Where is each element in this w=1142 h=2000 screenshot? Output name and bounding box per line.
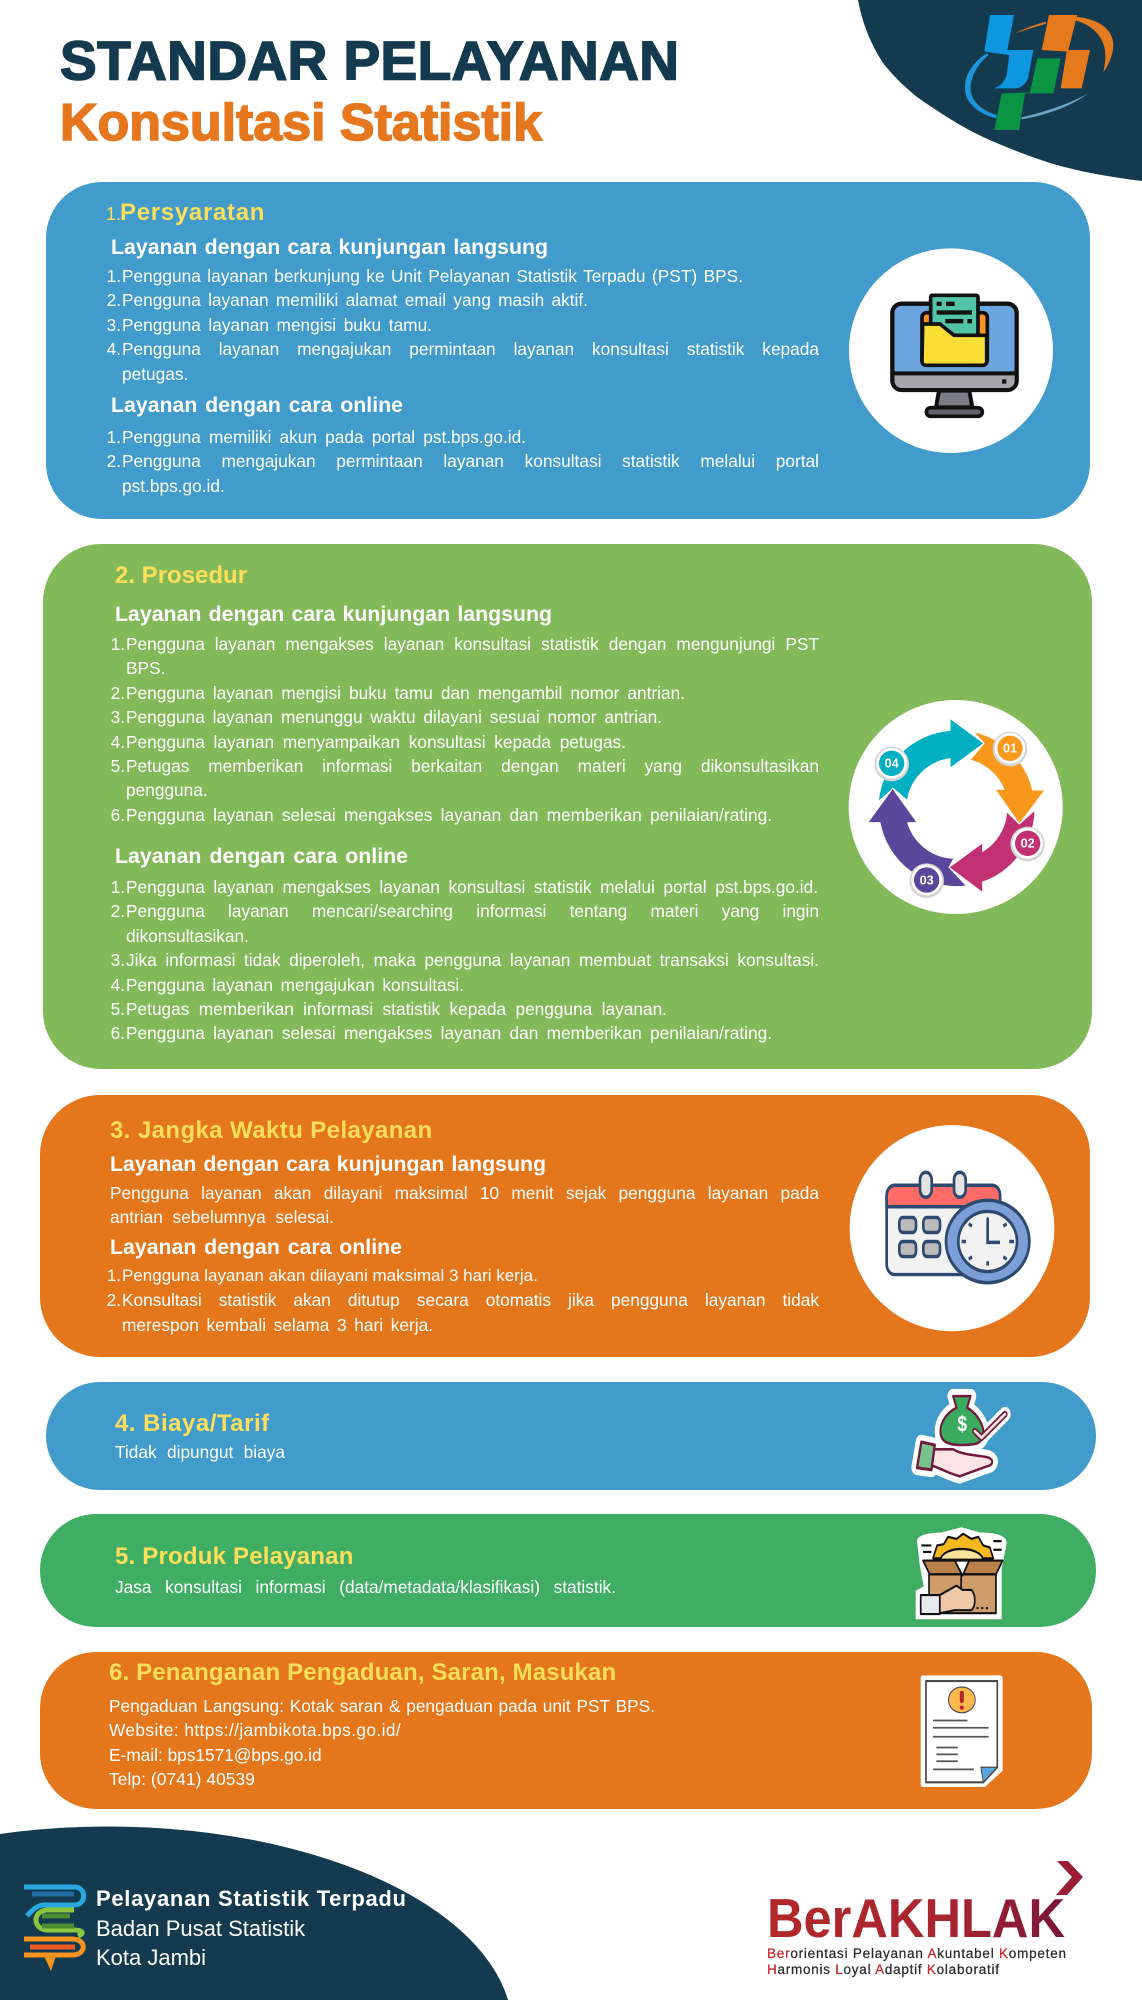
- list: online steps: pst.bps.go.id.: [122, 476, 225, 496]
- list: online items: [107, 1266, 819, 1335]
- list: online steps: Petugas memberikan informasi statistik kepada pengguna layanan.: [126, 999, 667, 1019]
- list: kunjungan langsung steps: [111, 634, 819, 825]
- list: kunjungan langsung steps: 4.: [111, 732, 125, 752]
- heading: 1. Persyaratan: 1.Persyaratan: [106, 199, 265, 226]
- list: kunjungan langsung steps: Petugas memberikan informasi berkaitan dengan materi yang dikonsultasikan: [126, 756, 819, 776]
- footer text: unit name: Kota Jambi: [96, 1945, 206, 1970]
- panel: 3 Jangka Waktu Pelayanan: [40, 1095, 1090, 1357]
- logo: BerAKHLAK: Harmonis Loyal Adaptif Kolaboratif: [767, 1962, 999, 1977]
- list: online items: Konsultasi statistik akan ditutup secara otomatis jika pengguna layanan tidak: [122, 1290, 819, 1310]
- icon: calendar and clock: [850, 1125, 1054, 1332]
- heading: 4. Biaya/Tarif: 4. Biaya/Tarif: [115, 1410, 270, 1437]
- list: kunjungan langsung steps: 1.: [111, 634, 125, 654]
- list: online steps: 6.: [111, 1023, 125, 1043]
- list: online steps: 5.: [111, 999, 125, 1019]
- text: kunjungan langsung description: antrian sebelumnya selesai.: [110, 1207, 334, 1227]
- title: STANDAR PELAYANAN: [60, 30, 679, 92]
- text: product description: Jasa konsultasi informasi (data/metadata/klasifikasi) statistik.: [115, 1577, 616, 1597]
- list: kunjungan langsung steps: Pengguna layanan berkunjung ke Unit Pelayanan Statistik Terpadu (PST) BPS.: [122, 266, 743, 286]
- icon: box with gear and hand: [916, 1527, 1007, 1620]
- footer text: unit name: Pelayanan Statistik Terpadu: [96, 1886, 407, 1911]
- icon: computer with folder: [849, 248, 1053, 453]
- title: [60, 30, 679, 152]
- logo: BPS: [964, 15, 1114, 130]
- subheading: kunjungan langsung: Layanan dengan cara kunjungan langsung: [115, 602, 552, 626]
- list: online steps: Pengguna mengajukan permintaan layanan konsultasi statistik melalui portal: [122, 451, 819, 471]
- list: online steps: Pengguna memiliki akun pada portal pst.bps.go.id.: [122, 427, 526, 447]
- list: online steps: 2.: [111, 901, 125, 921]
- list: online steps: 1.: [111, 877, 125, 897]
- heading: 5. Produk Pelayanan: 5. Produk Pelayanan: [115, 1543, 354, 1570]
- list: kunjungan langsung steps: 1.: [107, 266, 121, 286]
- icon: four-step cycle: 03: [920, 873, 934, 887]
- text: complaint contacts: Pengaduan Langsung: Kotak saran & pengaduan pada unit PST BPS.: [109, 1696, 655, 1716]
- list: online steps: 3.: [111, 950, 125, 970]
- text: complaint contacts: Telp: (0741) 40539: [109, 1769, 255, 1789]
- list: kunjungan langsung steps: [107, 266, 819, 384]
- list: online steps: [107, 427, 819, 496]
- logo: BerAKHLAK: BerAKHLAK: [767, 1887, 1065, 1949]
- icon: four-step cycle: 02: [1021, 837, 1035, 851]
- list: online steps: dikonsultasikan.: [126, 926, 249, 946]
- subheading: kunjungan langsung: Layanan dengan cara kunjungan langsung: [110, 1152, 546, 1176]
- heading: 3. Jangka Waktu Pelayanan: 3. Jangka Waktu Pelayanan: [110, 1117, 433, 1144]
- subheading: online: Layanan dengan cara online: [111, 393, 403, 417]
- list: online items: 2.: [107, 1290, 121, 1310]
- list: online steps: Jika informasi tidak diperoleh, maka pengguna layanan membuat transaksi konsultasi.: [126, 950, 819, 970]
- text: complaint contacts: E-mail: bps1571@bps.go.id: [109, 1745, 322, 1765]
- panel: 4 Biaya/Tarif: [46, 1382, 1096, 1490]
- footer text: unit name: Badan Pusat Statistik: [96, 1916, 305, 1940]
- list: kunjungan langsung steps: Pengguna layanan selesai mengakses layanan dan memberikan penilaian/rating.: [126, 805, 772, 825]
- list: kunjungan langsung steps: 5.: [111, 756, 125, 776]
- list: kunjungan langsung steps: 3.: [107, 315, 121, 335]
- heading: 2. Prosedur: 2. Prosedur: [115, 562, 247, 589]
- subheading: online: Layanan dengan cara online: [110, 1235, 402, 1259]
- list: kunjungan langsung steps: 2.: [111, 683, 125, 703]
- panel: 2 Prosedur: [43, 544, 1092, 1069]
- icon: four-step cycle: [848, 700, 1063, 914]
- list: kunjungan langsung steps: Pengguna layanan menunggu waktu dilayani sesuai nomor antrian.: [126, 707, 662, 727]
- list: kunjungan langsung steps: petugas.: [122, 364, 188, 384]
- title: Konsultasi Statistik: [60, 94, 542, 152]
- icon: PST book stack logo: [24, 1884, 86, 1971]
- icon: four-step cycle: 04: [885, 757, 899, 771]
- list: kunjungan langsung steps: 3.: [111, 707, 125, 727]
- logo: BerAKHLAK: [767, 1861, 1083, 1978]
- list: online steps: Pengguna layanan mencari/searching informasi tentang materi yang ingin: [126, 901, 819, 921]
- list: online items: Pengguna layanan akan dilayani maksimal 3 hari kerja.: [122, 1266, 538, 1285]
- list: online steps: Pengguna layanan selesai mengakses layanan dan memberikan penilaian/rating.: [126, 1023, 772, 1043]
- list: online items: 1.: [107, 1266, 121, 1285]
- text: fee description: Tidak dipungut biaya: [115, 1442, 285, 1462]
- panel: 1 Persyaratan: [46, 182, 1090, 519]
- text: kunjungan langsung description: [110, 1183, 819, 1227]
- list: kunjungan langsung steps: Pengguna layanan memiliki alamat email yang masih aktif.: [122, 290, 588, 310]
- list: kunjungan langsung steps: Pengguna layanan mengisi buku tamu.: [122, 315, 432, 335]
- list: kunjungan langsung steps: pengguna.: [126, 780, 208, 800]
- list: kunjungan langsung steps: 4.: [107, 339, 121, 359]
- subheading: kunjungan langsung: Layanan dengan cara kunjungan langsung: [111, 235, 548, 259]
- list: online items: merespon kembali selama 3 hari kerja.: [122, 1315, 433, 1335]
- list: online steps: 1.: [107, 427, 121, 447]
- text: kunjungan langsung description: Pengguna layanan akan dilayani maksimal 10 menit sejak pengguna layanan pada: [110, 1183, 819, 1203]
- list: kunjungan langsung steps: Pengguna layanan mengajukan permintaan layanan konsultasi statistik kepada: [122, 339, 819, 359]
- panel: 5 Produk Pelayanan: [40, 1514, 1096, 1627]
- list: kunjungan langsung steps: 6.: [111, 805, 125, 825]
- logo: BerAKHLAK: Berorientasi Pelayanan Akuntabel Kompeten: [767, 1946, 1066, 1961]
- decorative header shape: dark corner: [858, 0, 1142, 181]
- text: complaint contacts: [109, 1696, 655, 1789]
- list: online steps: Pengguna layanan mengakses layanan konsultasi statistik melalui portal pst.bps.go.id.: [126, 877, 818, 897]
- list: kunjungan langsung steps: 2.: [107, 290, 121, 310]
- icon: money bag on hand: $: [957, 1412, 967, 1437]
- panel: 6 Penanganan Pengaduan: [40, 1652, 1092, 1809]
- list: kunjungan langsung steps: Pengguna layanan mengakses layanan konsultasi statistik dengan mengunjungi PST: [126, 634, 819, 654]
- icon: four-step cycle: 01: [1003, 742, 1017, 756]
- list: kunjungan langsung steps: Pengguna layanan mengisi buku tamu dan mengambil nomor antrian.: [126, 683, 685, 703]
- footer dark shape: [0, 1826, 508, 2000]
- list: online steps: 2.: [107, 451, 121, 471]
- list: online steps: [111, 877, 819, 1043]
- footer text: unit name: [96, 1886, 407, 1970]
- heading: 6. Penanganan Pengaduan, Saran, Masukan: 6. Penanganan Pengaduan, Saran, Masukan: [109, 1659, 616, 1686]
- list: kunjungan langsung steps: Pengguna layanan menyampaikan konsultasi kepada petugas.: [126, 732, 626, 752]
- text: complaint contacts: Website: https://jambikota.bps.go.id/: [109, 1720, 401, 1740]
- list: kunjungan langsung steps: BPS.: [126, 658, 165, 678]
- list: online steps: 4.: [111, 975, 125, 995]
- icon: document with warning: [920, 1675, 1003, 1787]
- icon: money bag on hand: [911, 1388, 1011, 1484]
- subheading: online: Layanan dengan cara online: [115, 844, 408, 868]
- list: online steps: Pengguna layanan mengajukan konsultasi.: [126, 975, 464, 995]
